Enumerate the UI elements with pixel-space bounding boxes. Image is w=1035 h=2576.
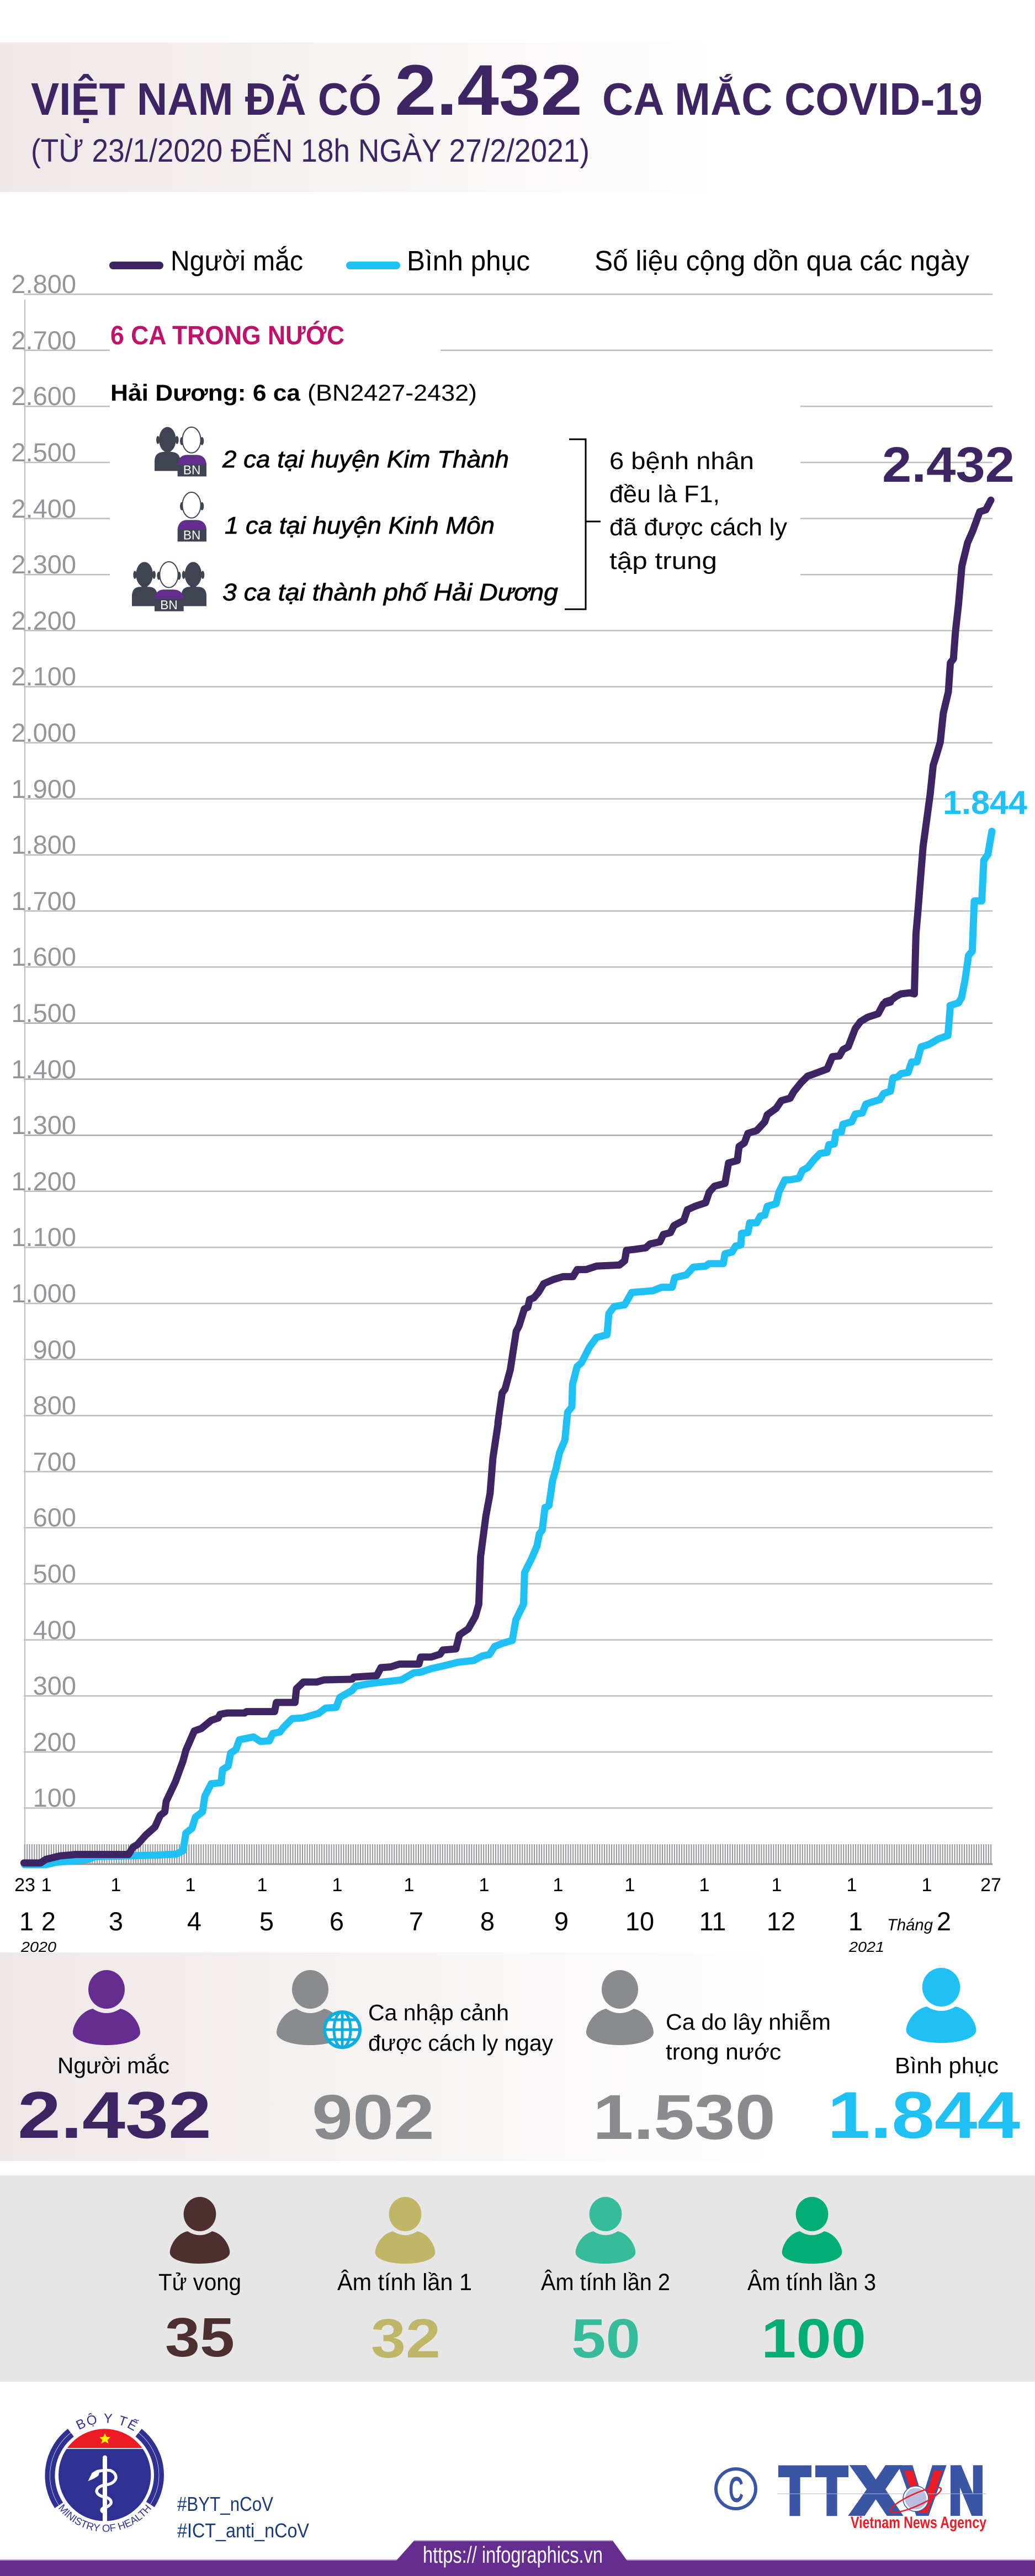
end value: recovered: 1.844 (943, 784, 1028, 821)
month labels: 9 (554, 1907, 569, 1936)
confirmed line (24, 500, 991, 1863)
x axis hatch band (24, 1844, 992, 1864)
month labels: 2020 (20, 1939, 57, 1955)
y axis labels: 1.200 (11, 1167, 76, 1196)
day ticks: 1 (922, 1875, 932, 1896)
y axis labels: 700 (33, 1447, 76, 1476)
icon: one patient: BN (183, 528, 200, 542)
y axis labels: 2.400 (11, 494, 76, 523)
y axis labels: 1.900 (11, 774, 76, 803)
y axis labels: 1.800 (11, 830, 76, 859)
y axis labels: 1.300 (11, 1110, 76, 1140)
note: F1 isolated (609, 448, 787, 574)
subtitle: (TỪ 23/1/2020 ĐẾN 18h NGÀY 27/2/2021) (31, 133, 590, 169)
month labels: 2 (41, 1907, 56, 1936)
note: F1 isolated: đã được cách ly (609, 514, 787, 541)
icon: globe and orbit (888, 2483, 943, 2516)
note: F1 isolated: đều là F1, (609, 481, 720, 508)
day ticks: 1 (257, 1875, 267, 1896)
stat: recovered: Bình phục (895, 2053, 999, 2078)
hashtags: #BYT_nCoV (177, 2493, 273, 2515)
stat: imported: Ca nhập cảnh (368, 2000, 509, 2025)
chart grid lines (24, 294, 992, 1864)
y axis labels: 900 (33, 1335, 76, 1364)
stat: domestic (586, 1970, 831, 2153)
day ticks: 1 (332, 1875, 342, 1896)
stat: domestic: Ca do lây nhiễm (666, 2009, 831, 2035)
icon: one patient (178, 492, 206, 542)
stat: negative twice (541, 2197, 670, 2370)
y axis labels (11, 269, 76, 1812)
legend: Bình phục (407, 245, 530, 276)
logo: Vietnam News Agency: V (901, 2453, 944, 2528)
logo: Vietnam News Agency (716, 2453, 986, 2532)
bracket (565, 439, 601, 609)
day ticks: 1 (185, 1875, 195, 1896)
y axis labels: 2.800 (11, 269, 76, 299)
day ticks: 1 (479, 1875, 489, 1896)
stat: negative three times: Âm tính lần 3 (747, 2269, 876, 2296)
day ticks: 1 (847, 1875, 857, 1896)
stat: domestic: 1.530 (593, 2082, 776, 2153)
logo: Vietnam News Agency: X (852, 2453, 900, 2528)
heading: 6 domestic cases: 6 CA TRONG NƯỚC (110, 320, 344, 350)
stat: recovered: 1.844 (827, 2078, 1020, 2152)
text: Kinh Mon: 1 ca tại huyện Kinh Môn (225, 512, 495, 539)
logo: Vietnam News Agency: Vietnam News Agency (851, 2514, 986, 2532)
month labels: 6 (330, 1907, 344, 1936)
month labels: 2021 (848, 1939, 884, 1955)
legend: Người mắc (171, 245, 303, 276)
legend (113, 245, 969, 276)
stat: deaths: Tử vong (158, 2269, 241, 2296)
day ticks: 1 (772, 1875, 782, 1896)
y axis labels: 2.300 (11, 550, 76, 579)
title: 2.432 (395, 50, 582, 130)
line chart (11, 269, 1028, 1955)
month labels: 10 (625, 1907, 654, 1936)
end value: confirmed: 2.432 (882, 438, 1015, 493)
footer bar (0, 2541, 1035, 2576)
stat: deaths (158, 2197, 241, 2369)
y axis labels: 2.600 (11, 381, 76, 411)
logo: Vietnam News Agency: T (779, 2453, 810, 2528)
y axis labels: 1.700 (11, 886, 76, 916)
y axis labels: 600 (33, 1503, 76, 1532)
stat: imported: được cách ly ngay (368, 2030, 553, 2056)
stat: recovered (827, 1968, 1020, 2152)
month labels: 4 (187, 1907, 201, 1936)
logo: Vietnam News Agency: T (816, 2453, 847, 2528)
footer url: https:// infographics.vn (423, 2542, 603, 2568)
stat: confirmed (18, 1970, 211, 2152)
icon: globe (325, 2012, 360, 2047)
day ticks: 1 (625, 1875, 635, 1896)
y axis labels: 200 (33, 1727, 76, 1757)
y axis labels: 2.000 (11, 718, 76, 747)
month labels: 1 (848, 1907, 863, 1936)
y axis labels: 1.100 (11, 1222, 76, 1252)
icon: two people with patient (155, 427, 206, 477)
icon: two people with patient: BN (183, 462, 200, 477)
month labels: 12 (767, 1907, 795, 1936)
month labels: 3 (109, 1907, 123, 1936)
stat: negative twice: Âm tính lần 2 (541, 2269, 670, 2296)
y axis labels: 1.400 (11, 1055, 76, 1084)
province line (110, 380, 477, 406)
month labels: 1 (19, 1907, 34, 1936)
logo: Vietnam News Agency: N (949, 2453, 984, 2528)
hashtags: #ICT_anti_nCoV (177, 2519, 309, 2542)
text: Kim Thanh: 2 ca tại huyện Kim Thành (222, 446, 509, 473)
stat: negative twice: 50 (571, 2308, 640, 2370)
y axis labels: 400 (33, 1615, 76, 1644)
day ticks: 1 (41, 1875, 51, 1896)
header band (0, 42, 983, 192)
y axis labels: 800 (33, 1391, 76, 1420)
day ticks: 23 (14, 1875, 35, 1896)
icon: copyright (716, 2469, 756, 2510)
logo: Ministry of Health: MINISTRY OF HEALTH (59, 2504, 151, 2532)
y axis labels: 1.500 (11, 998, 76, 1028)
y axis labels: 2.500 (11, 438, 76, 467)
day ticks: 1 (553, 1875, 563, 1896)
month labels (19, 1907, 951, 1955)
icon: copyright: C (729, 2469, 744, 2510)
icon: three people with patient: BN (160, 598, 178, 612)
y axis labels: 2.700 (11, 326, 76, 355)
day ticks: 1 (111, 1875, 121, 1896)
day ticks: 1 (699, 1875, 709, 1896)
stat: confirmed: 2.432 (18, 2078, 211, 2152)
note: F1 isolated: 6 bệnh nhân (609, 448, 754, 475)
stat: negative once: 32 (371, 2308, 440, 2370)
logo: Ministry of Health: BỘ Y TẾ (76, 2413, 139, 2431)
month labels: 11 (699, 1907, 726, 1936)
month labels: 5 (259, 1907, 274, 1936)
month labels: 2 (937, 1907, 951, 1936)
stat: deaths: 35 (165, 2307, 235, 2369)
y axis labels: 2.100 (11, 662, 76, 691)
panel: domestic cases (110, 320, 787, 612)
month labels: 8 (480, 1907, 495, 1936)
y axis labels: 1.600 (11, 942, 76, 971)
y axis labels: 300 (33, 1671, 76, 1700)
province line: (BN2427-2432) (307, 380, 477, 406)
panel: main statistics (0, 1952, 1020, 2161)
panel: outcomes (0, 2175, 1035, 2382)
day ticks (14, 1875, 1001, 1896)
text: Hai Duong city: 3 ca tại thành phố Hải Dương (222, 579, 559, 606)
province line: Hải Dương: 6 ca (110, 380, 301, 406)
stat: confirmed: Người mắc (57, 2053, 169, 2078)
stat: negative once (337, 2197, 472, 2370)
stat: negative three times (747, 2197, 876, 2370)
day ticks: 27 (980, 1875, 1001, 1896)
stat: negative three times: 100 (761, 2308, 866, 2370)
recovered line (25, 831, 992, 1865)
month labels: Tháng (887, 1916, 933, 1934)
hashtags (177, 2493, 309, 2542)
title: VIỆT NAM ĐÃ CÓ (31, 73, 381, 125)
month labels: 7 (409, 1907, 423, 1936)
y axis labels: 2.200 (11, 606, 76, 635)
note: F1 isolated: tập trung (609, 547, 717, 574)
title (31, 50, 983, 130)
stat: imported (277, 1970, 553, 2153)
logo: Vietnam News Agency: V (904, 2457, 943, 2526)
y axis labels: 1.000 (11, 1279, 76, 1308)
logo: Ministry of Health (45, 2413, 164, 2532)
day ticks: 1 (404, 1875, 414, 1896)
icon: three people with patient (132, 562, 206, 612)
y axis labels: 500 (33, 1559, 76, 1588)
legend: Số liệu cộng dồn qua các ngày (595, 245, 969, 276)
stat: domestic: trong nước (666, 2039, 781, 2064)
y axis labels: 100 (33, 1783, 76, 1812)
stat: negative once: Âm tính lần 1 (337, 2269, 472, 2296)
title: CA MẮC COVID-19 (602, 73, 983, 125)
stat: imported: 902 (312, 2082, 434, 2153)
